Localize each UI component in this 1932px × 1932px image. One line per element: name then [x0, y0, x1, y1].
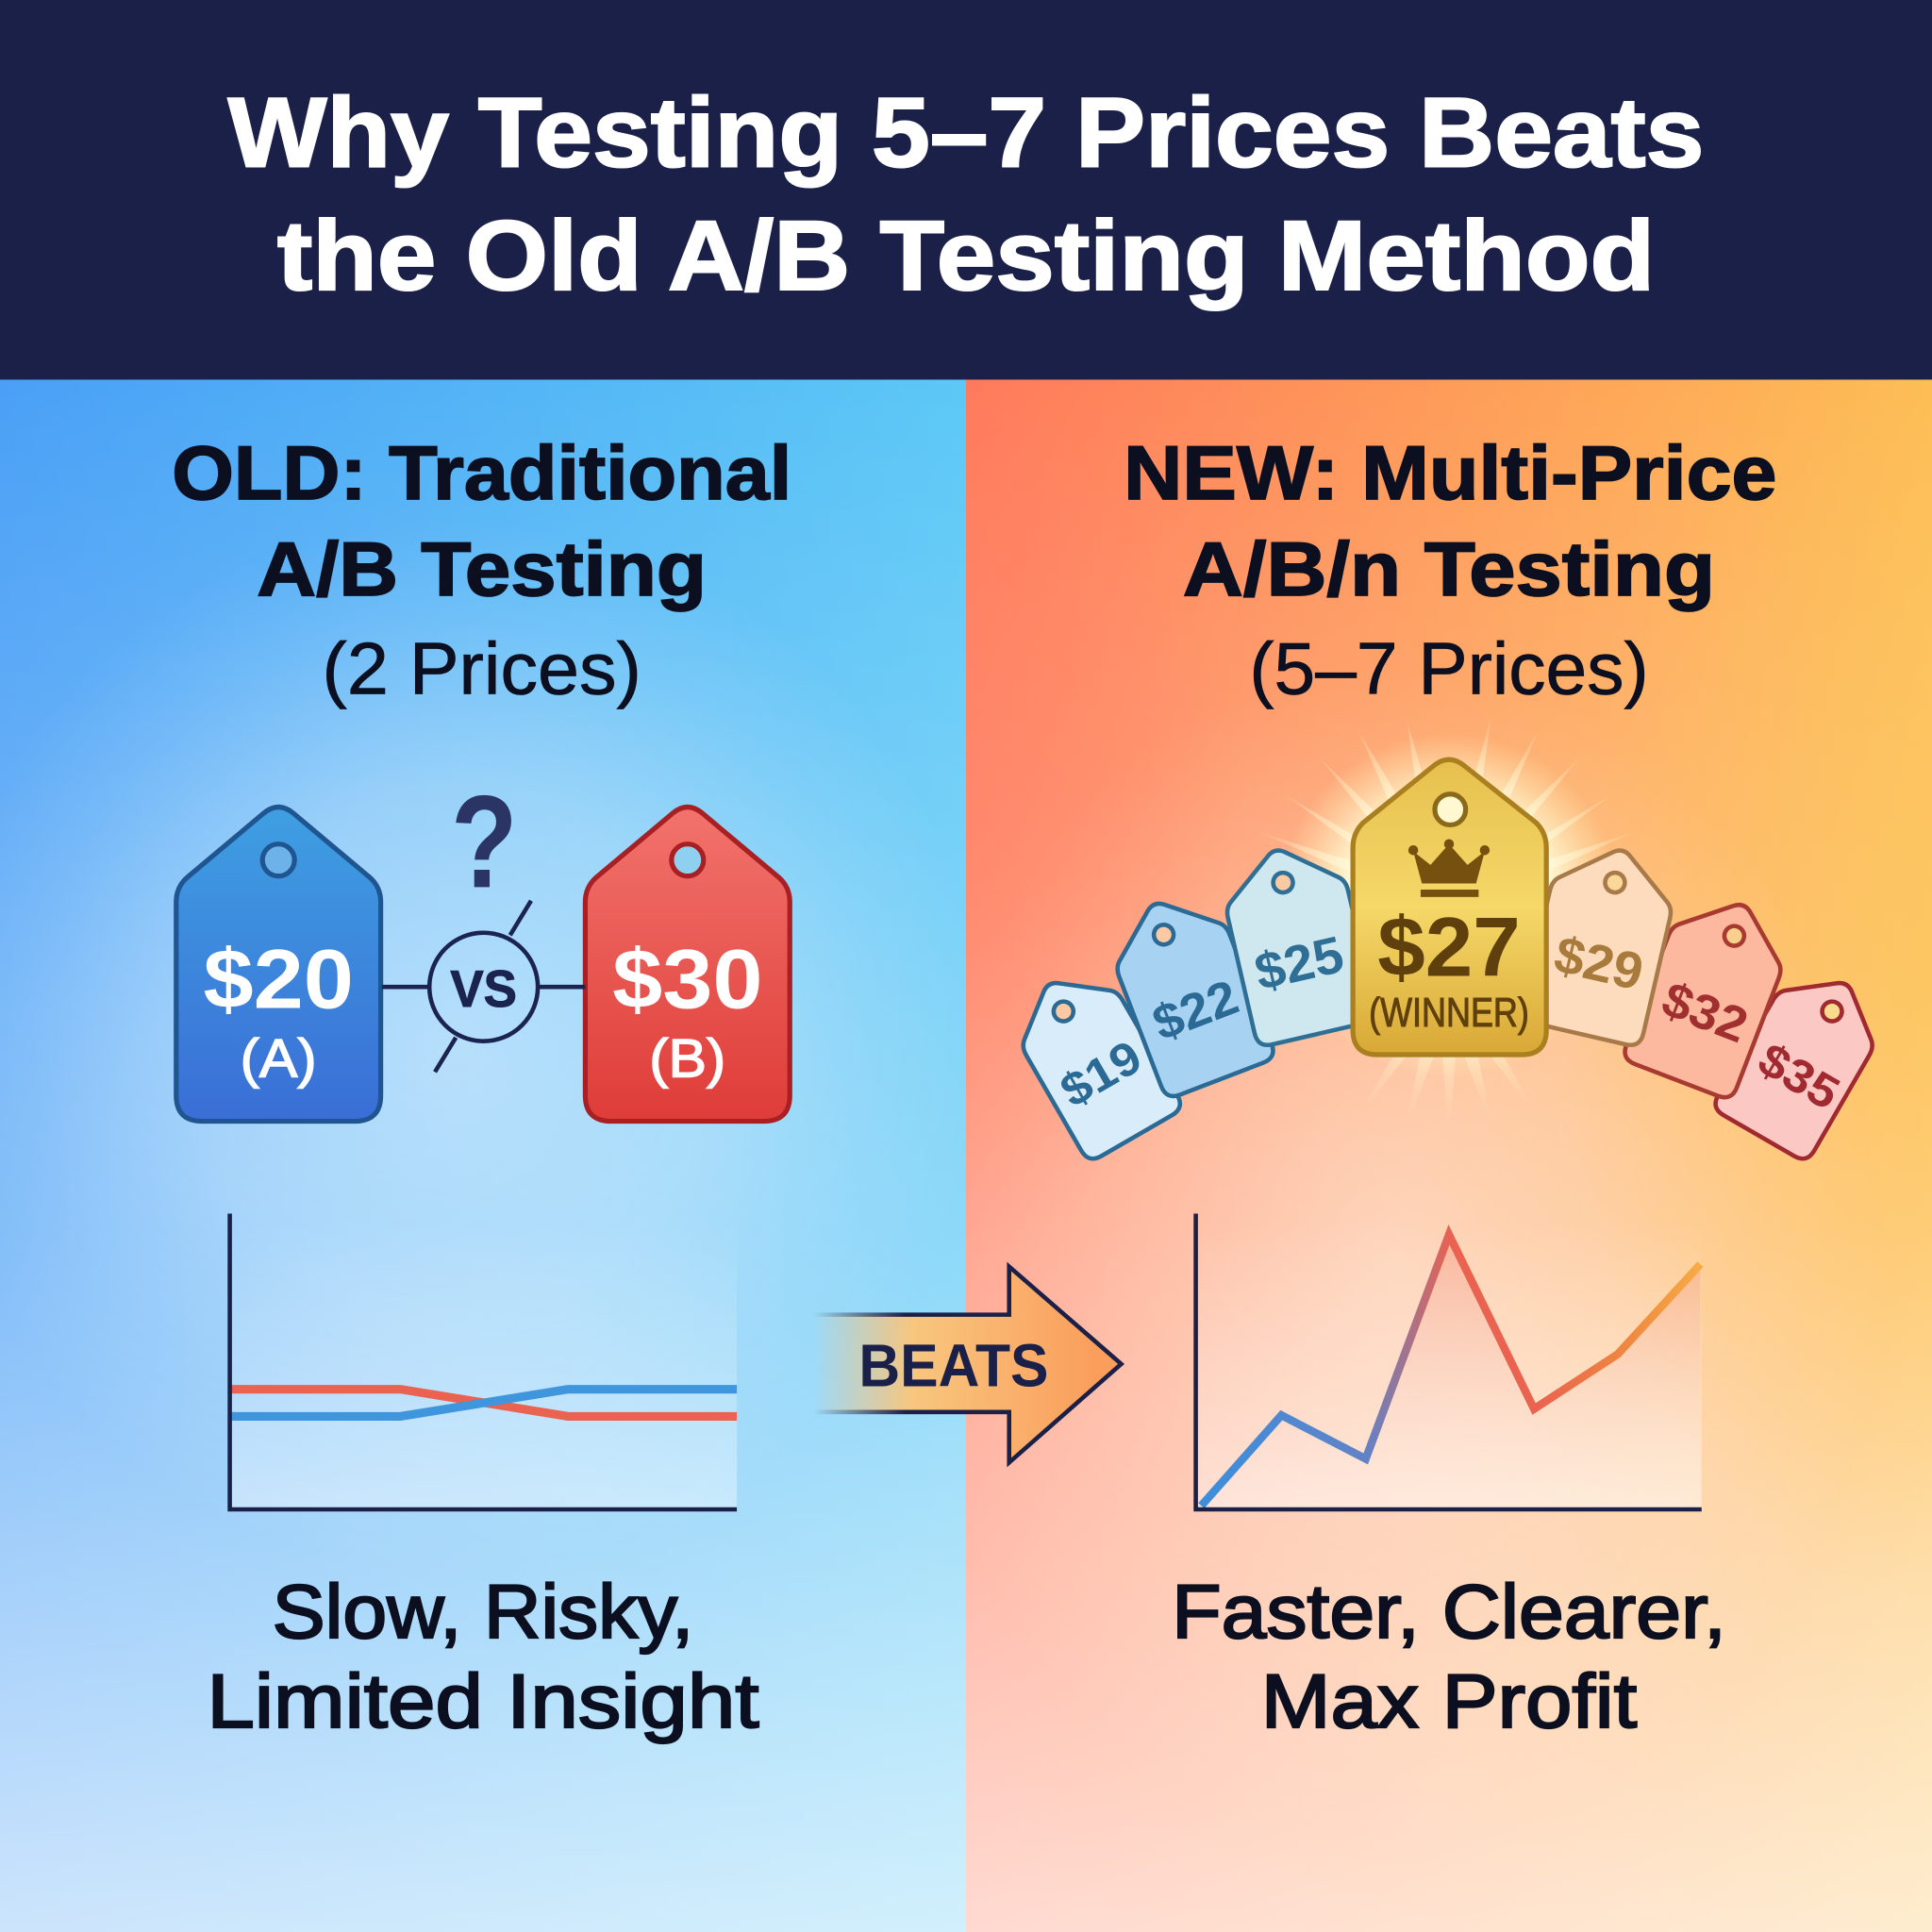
caption: new method: Faster, Clearer,: [1172, 1570, 1726, 1655]
tag $32: $32: [1655, 972, 1755, 1054]
chart: rising multi-price line: [1196, 1214, 1702, 1509]
winner glow rays: [1258, 718, 1635, 1136]
price tag A: [176, 808, 381, 1122]
tag $27 winner: (WINNER): [1369, 991, 1529, 1036]
tag $35: [1711, 957, 1894, 1163]
chart: flat A/B lines: [230, 1214, 737, 1509]
heading: new method: (5–7 Prices): [1249, 626, 1649, 709]
heading: new method: NEW: Multi-Price: [1124, 431, 1776, 516]
price tag B: $30: [612, 932, 762, 1025]
tag $27 winner: $27: [1377, 900, 1521, 993]
tag $22: $22: [1145, 970, 1245, 1052]
caption: new method: Max Profit: [1261, 1659, 1637, 1744]
heading: new method: A/B/n Testing: [1183, 527, 1715, 612]
heading: old method: [172, 431, 791, 709]
panel: new method background: [966, 379, 1932, 1932]
price tag A: $20: [204, 932, 354, 1025]
tag $22: [1100, 883, 1277, 1100]
title line 1: Why Testing 5–7 Prices Beats: [228, 77, 1704, 188]
question mark: ?: [451, 767, 518, 915]
heading: old method: OLD: Traditional: [172, 431, 791, 516]
versus badge: VS: [450, 959, 517, 1018]
arrow: beats: [813, 1267, 1122, 1462]
price tag B: [585, 808, 790, 1122]
caption: old method: [207, 1570, 759, 1744]
icon: crown: [1408, 839, 1490, 897]
tag $35: $35: [1749, 1032, 1848, 1120]
tag $29: $29: [1549, 924, 1649, 1002]
tag $25: $25: [1249, 924, 1349, 1002]
tag $19: [1002, 957, 1185, 1163]
heading: old method: A/B Testing: [257, 527, 707, 612]
tag $29: [1520, 837, 1682, 1048]
arrow: beats: BEATS: [858, 1331, 1049, 1399]
panel: old method background: [0, 379, 986, 1932]
heading: new method: [1124, 431, 1776, 709]
price tag B: (B): [649, 1029, 725, 1090]
title line 2: the Old A/B Testing Method: [277, 201, 1655, 311]
tag $32: [1621, 885, 1798, 1101]
tag $27 winner: [1353, 759, 1546, 1055]
tag $19: $19: [1052, 1030, 1150, 1118]
price tag A: (A): [241, 1029, 317, 1090]
caption: new method: [1172, 1570, 1726, 1744]
caption: old method: Slow, Risky,: [273, 1570, 693, 1655]
tag $25: [1216, 837, 1378, 1048]
versus badge: [382, 901, 585, 1072]
heading: old method: (2 Prices): [323, 626, 641, 709]
caption: old method: Limited Insight: [207, 1659, 759, 1744]
header banner: [0, 0, 1932, 379]
